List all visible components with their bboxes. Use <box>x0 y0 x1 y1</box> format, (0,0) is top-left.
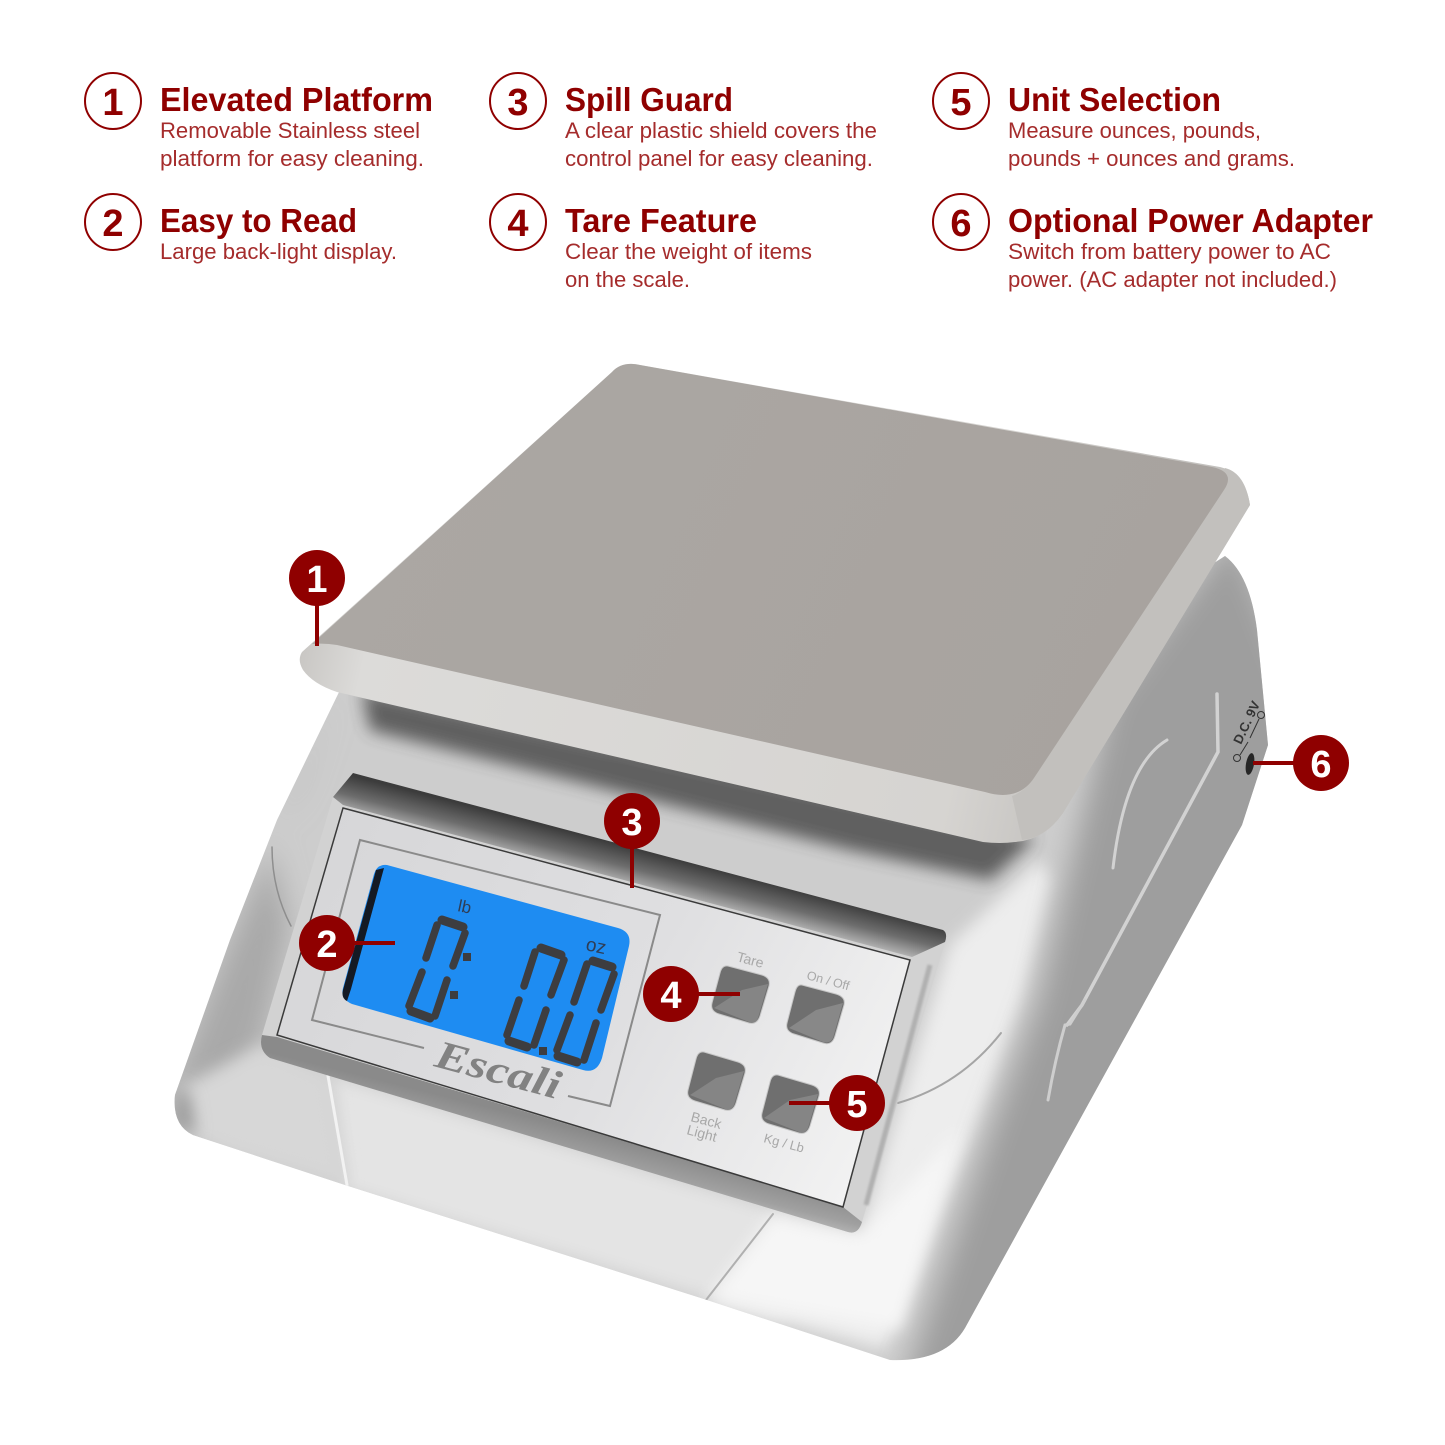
callout 2: 2 <box>316 924 338 966</box>
control panel <box>277 808 910 1207</box>
bezel <box>261 773 946 1233</box>
callout 4: 4 <box>660 975 682 1017</box>
button: back light: Light <box>685 1121 719 1145</box>
feature 4: tare feature: on the scale. <box>565 267 690 292</box>
callout 2 <box>299 915 395 971</box>
callout 5 <box>789 1075 885 1131</box>
digital kitchen scale illustration <box>174 364 1268 1360</box>
button: on/off: On / Off <box>805 968 851 993</box>
callout 5: 5 <box>846 1084 868 1126</box>
feature 3: spill guard: 3 <box>507 82 529 124</box>
feature 2: easy to read: Easy to Read <box>160 202 357 239</box>
lb unit label: lb <box>456 896 473 918</box>
button: on/off <box>787 968 851 1044</box>
body seams <box>272 694 1218 1300</box>
feature 4: tare feature: Tare Feature <box>565 202 757 239</box>
feature 6: optional power adapter <box>933 194 1373 292</box>
feature 3: spill guard: control panel for easy cleaning. <box>565 146 873 171</box>
bezel top shadow <box>333 773 946 957</box>
callouts <box>289 550 1349 1131</box>
platform bevel edge <box>300 364 1250 843</box>
platform right bevel <box>1012 468 1250 840</box>
feature 1: elevated platform <box>85 73 433 171</box>
callout 1: 1 <box>306 559 328 601</box>
feature 3: spill guard <box>490 73 877 171</box>
corner dark of left foot <box>172 1085 196 1135</box>
left foot <box>176 1043 330 1172</box>
button: tare <box>712 948 769 1023</box>
lcd back-light display <box>342 865 630 1071</box>
feature 4: tare feature: 4 <box>507 203 529 245</box>
feature 1: elevated platform: platform for easy cleaning. <box>160 146 424 171</box>
callout 4 <box>643 966 740 1022</box>
feature 5: unit selection: Unit Selection <box>1008 81 1221 118</box>
display frame <box>312 840 660 1106</box>
feature 2: easy to read: Large back-light display. <box>160 239 397 264</box>
feature 1: elevated platform: Elevated Platform <box>160 81 433 118</box>
feature 6: optional power adapter: Optional Power Adapter <box>1008 202 1373 239</box>
feature 4: tare feature <box>490 194 812 292</box>
bright band right of bezel <box>705 860 1052 1350</box>
feature 1: elevated platform: Removable Stainless steel <box>160 118 420 143</box>
callout 6 <box>1253 735 1349 791</box>
right foot highlight <box>718 1170 942 1332</box>
feature 3: spill guard: Spill Guard <box>565 81 733 118</box>
feature 5: unit selection <box>933 73 1295 171</box>
under-platform shadow <box>362 690 1035 880</box>
platform top surface <box>312 364 1228 795</box>
scale body <box>174 556 1268 1360</box>
digit 0 (pounds) <box>409 925 465 1016</box>
button: back light <box>685 1052 745 1145</box>
feature 2: easy to read <box>85 194 397 264</box>
feature 5: unit selection: Measure ounces, pounds, <box>1008 118 1261 143</box>
oz unit label: oz <box>584 934 608 959</box>
callout 6: 6 <box>1310 744 1332 786</box>
feature 3: spill guard: A clear plastic shield covers the <box>565 118 877 143</box>
bezel right rim stripe <box>866 965 930 1205</box>
button: kg/lb <box>762 1075 819 1156</box>
feature 6: optional power adapter: Switch from battery power to AC <box>1008 239 1331 264</box>
button: tare: Tare <box>735 948 766 971</box>
colon <box>450 957 471 995</box>
feature 4: tare feature: Clear the weight of items <box>565 239 812 264</box>
lower front light area <box>334 1078 810 1300</box>
feature list <box>85 73 1373 292</box>
button: back light: Back <box>689 1108 724 1132</box>
feature 5: unit selection: 5 <box>950 82 972 124</box>
power port: D.C. 9V <box>1230 698 1263 746</box>
left side shading <box>174 857 298 1134</box>
lcd digits <box>409 920 614 1062</box>
feature 5: unit selection: pounds + ounces and grams. <box>1008 146 1295 171</box>
digit 0 (ounces tens) <box>507 952 564 1045</box>
feature 1: elevated platform: 1 <box>102 82 124 124</box>
callout 3: 3 <box>621 802 643 844</box>
stainless steel platform <box>300 364 1250 843</box>
lower bezel rim <box>261 1035 862 1233</box>
callout 3 <box>604 793 660 888</box>
right side grey face <box>898 556 1268 1360</box>
feature 2: easy to read: 2 <box>102 203 124 245</box>
feature 6: optional power adapter: 6 <box>950 203 972 245</box>
digit 0 (ounces ones) <box>557 964 614 1060</box>
callout 1 <box>289 550 345 646</box>
button: kg/lb: Kg / Lb <box>762 1130 806 1156</box>
power port <box>1230 698 1264 776</box>
escali logo: Escali <box>429 1031 566 1108</box>
feature 6: optional power adapter: power. (AC adapter not included.) <box>1008 267 1337 292</box>
